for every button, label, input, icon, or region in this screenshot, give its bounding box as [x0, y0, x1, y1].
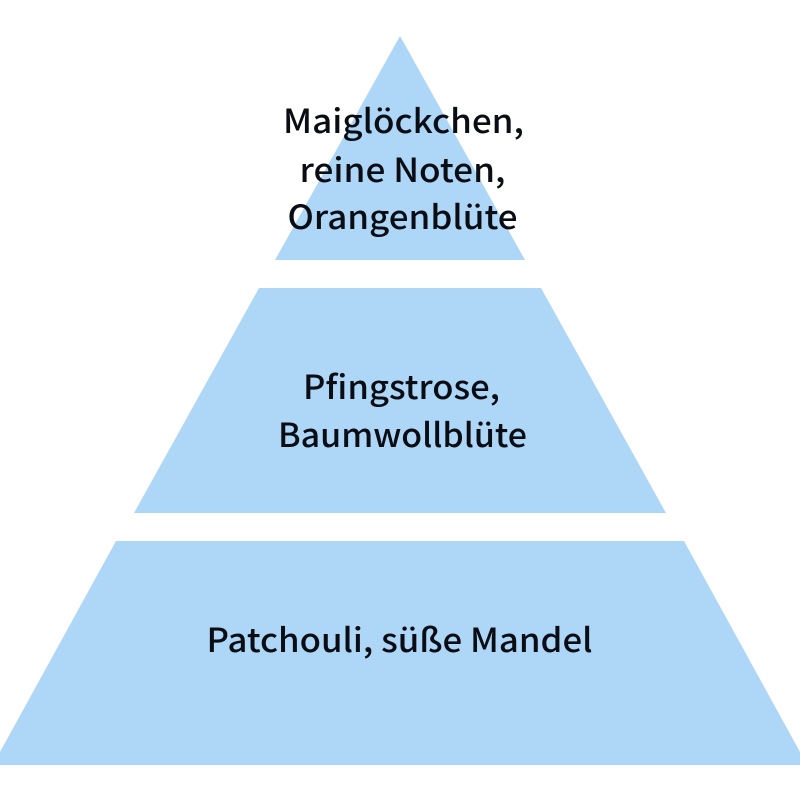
pyramid tier: bottom: Patchouli, süße Mandel [206, 614, 592, 662]
pyramid tier: top: Maiglöckchen, [283, 95, 524, 143]
pyramid tier: top [275, 36, 525, 260]
pyramid tier: top: Orangenblüte [288, 191, 518, 239]
pyramid tier: bottom [0, 541, 800, 765]
pyramid tier: top: reine Noten, [300, 144, 506, 192]
pyramid tier: middle: Pfingstrose, [303, 361, 500, 409]
pyramid tier: middle: Baumwollblüte [278, 409, 527, 457]
pyramid tier: middle [134, 288, 666, 513]
